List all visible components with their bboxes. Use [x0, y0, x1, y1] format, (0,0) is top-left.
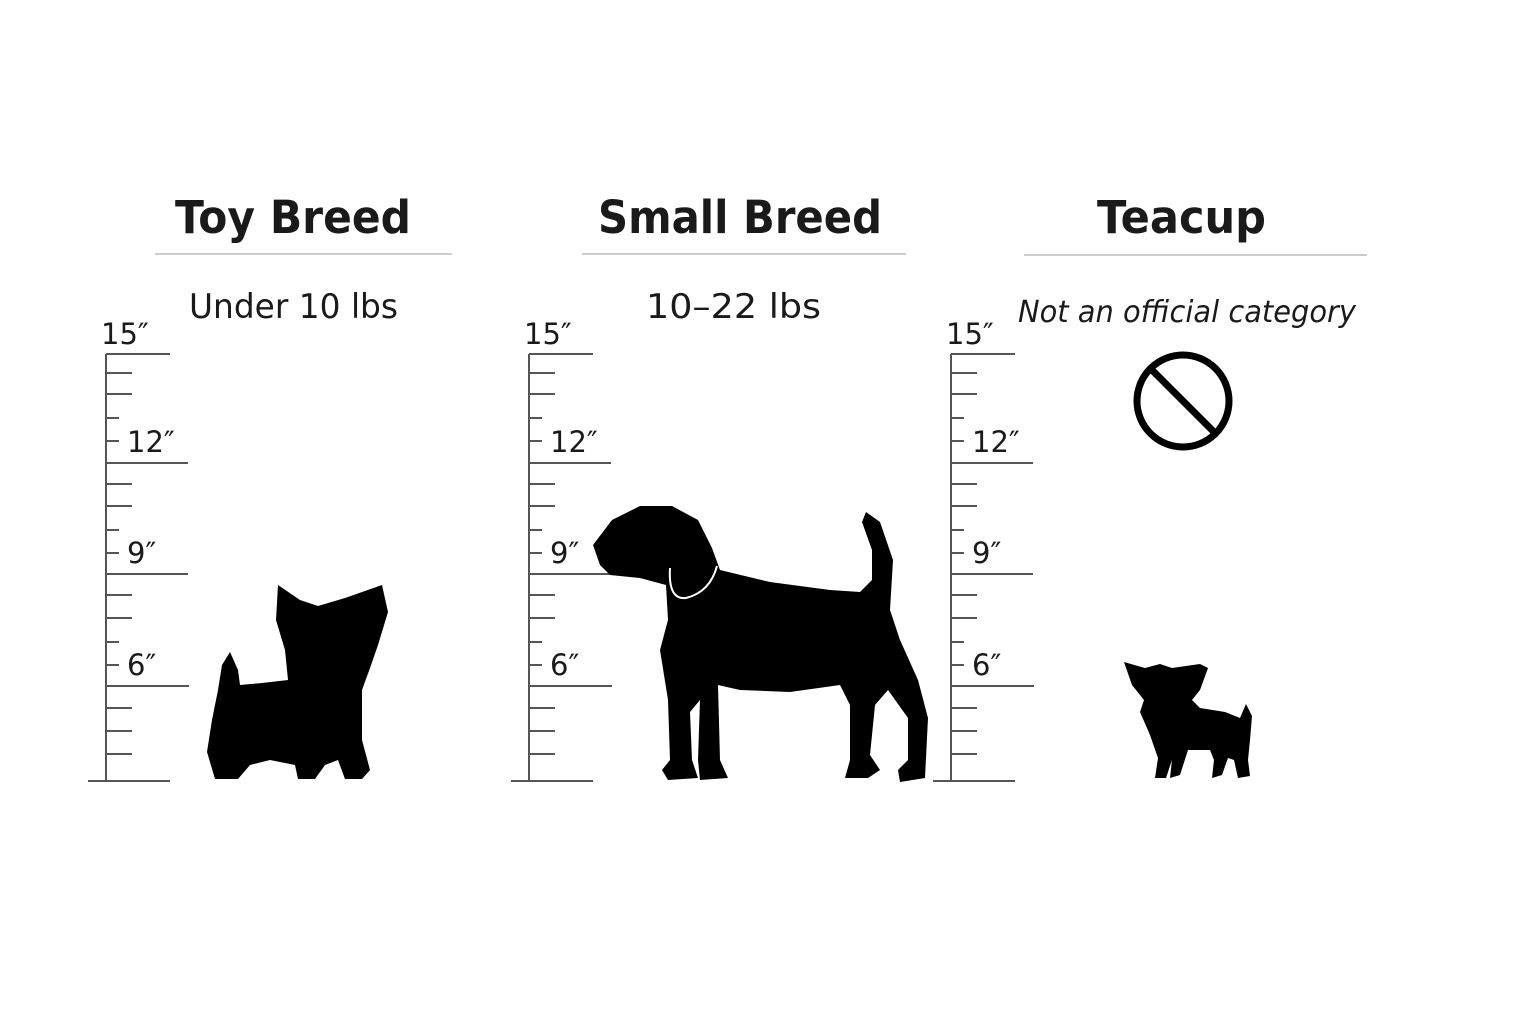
ruler: small	[511, 317, 612, 781]
ruler: teacup: 12″	[972, 425, 1020, 459]
ruler: teacup: 6″	[972, 648, 1001, 682]
collar	[670, 566, 717, 598]
icon: prohibited sign	[1137, 355, 1229, 447]
icon: teacup dog (chihuahua)	[1124, 662, 1252, 778]
ruler: teacup: 9″	[972, 536, 1001, 570]
title: Toy Breed: Toy Breed	[175, 191, 411, 244]
ruler: toy: 12″	[127, 425, 175, 459]
ruler: toy: 15″	[101, 317, 149, 351]
icon: toy dog (yorkie)	[207, 585, 388, 779]
ruler: toy: 6″	[127, 648, 156, 682]
ruler: teacup: 15″	[946, 317, 994, 351]
ruler: teacup	[933, 317, 1034, 781]
ruler: small: 9″	[550, 536, 579, 570]
title: Teacup: Teacup	[1097, 191, 1266, 244]
ruler: toy	[88, 317, 189, 781]
ruler: small: 6″	[550, 648, 579, 682]
title: Small Breed: Small Breed	[598, 191, 882, 244]
subtitle: Under 10 lbs: Under 10 lbs	[189, 287, 398, 327]
subtitle: Not an official category: Not an official category	[1018, 295, 1357, 330]
subtitle: 10–22 lbs: 10–22 lbs	[646, 287, 821, 327]
icon: small dog (beagle)	[593, 506, 928, 782]
ruler: small: 15″	[524, 317, 572, 351]
ruler: toy: 9″	[127, 536, 156, 570]
ruler: small: 12″	[550, 425, 598, 459]
